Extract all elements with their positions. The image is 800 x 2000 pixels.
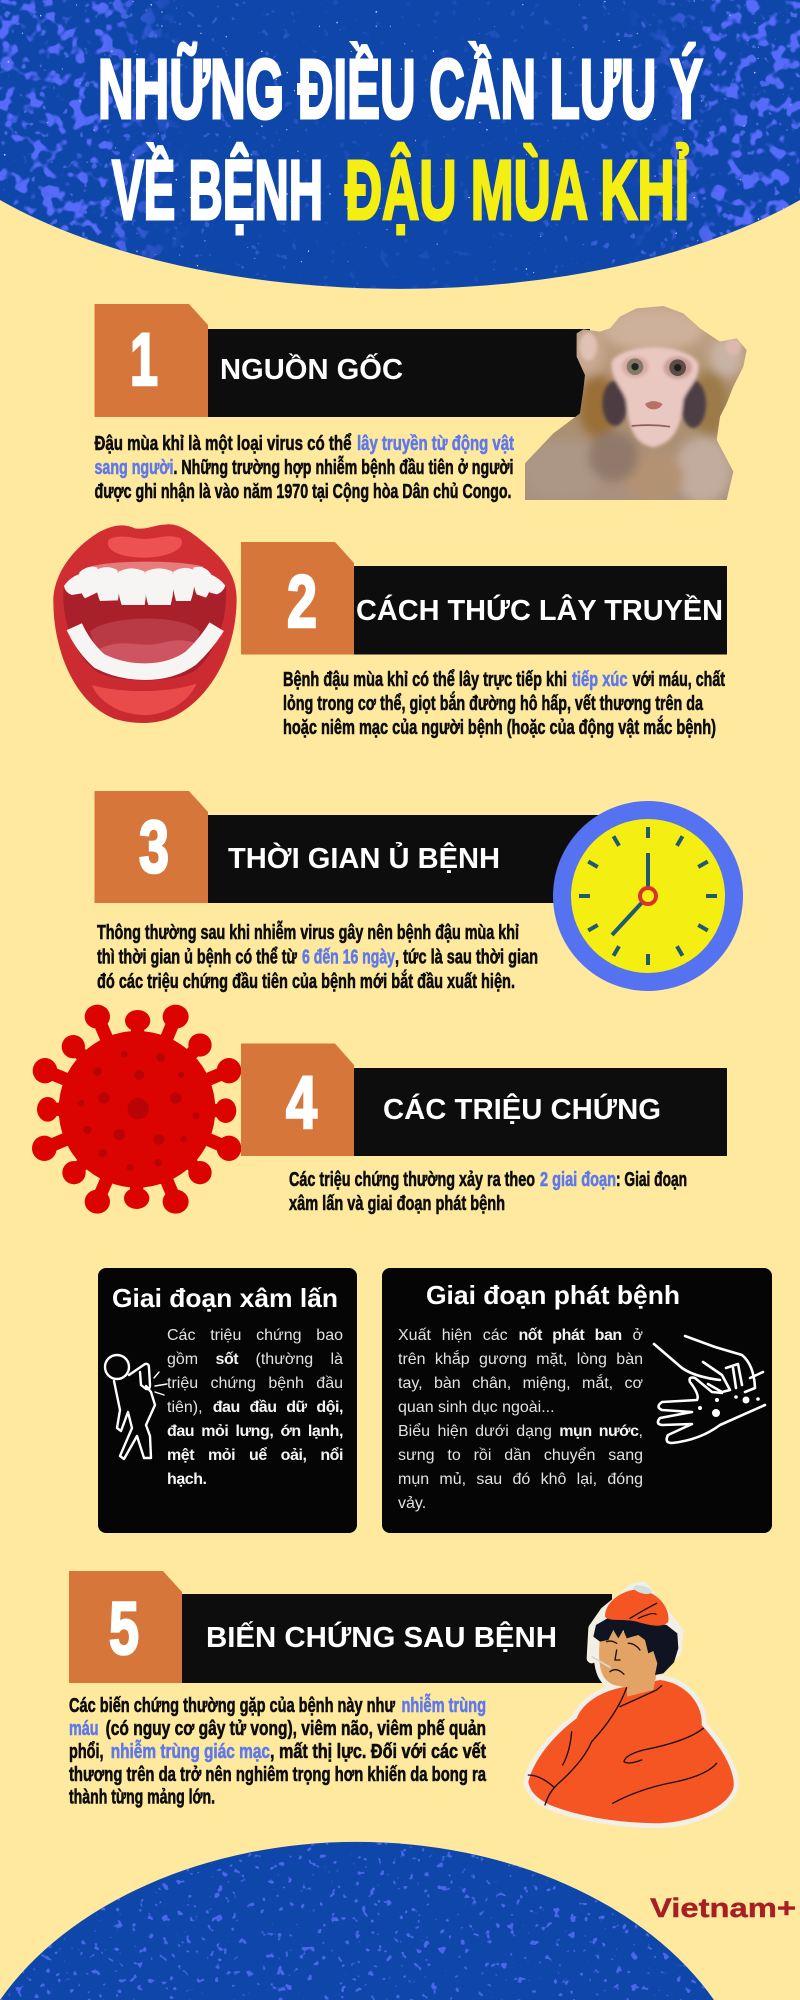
- section 5 orange number badge: [69, 1571, 182, 1683]
- icon: sick man wrapped in blanket: [528, 1584, 734, 1823]
- section 4 body text: : Giai đoạn: [616, 1169, 687, 1191]
- section 5 body text: Các biến chứng thường gặp của bệnh này như: [69, 1695, 395, 1717]
- section 1 body text: Đậu mùa khỉ là một loại virus có thể: [94, 433, 352, 455]
- heading: nguồn gốc: NGUỒN GỐC: [220, 352, 403, 386]
- section 3 body text: Thông thường sau khi nhiễm virus gây nên bệnh đậu mùa khỉ: [97, 920, 519, 944]
- heading: cách thức lây truyền: CÁCH THỨC LÂY TRUYỀN: [356, 593, 723, 627]
- panel text: eruptive phase symptoms: Xuất hiện các nốt phát ban ở: [398, 1327, 643, 1344]
- panel text: eruptive phase symptoms: Biểu hiện dưới dạng mụn nước,: [398, 1423, 643, 1440]
- section 4 body text: 2 giai đoạn: [540, 1169, 616, 1191]
- section 3 body text: đó các triệu chứng đầu tiên của bệnh mới bắt đầu xuất hiện.: [97, 969, 515, 993]
- section 5 body text: nhiễm trùng giác mạc: [111, 1739, 270, 1763]
- section 3 body text: 6 đến 16 ngày: [302, 946, 396, 968]
- logo: Vietnam+: Vietnam+: [650, 1893, 796, 1923]
- section 1 orange number badge: [94, 304, 208, 417]
- section 5 body text: , mất thị lực. Đối với các vết: [270, 1741, 486, 1763]
- panel text: eruptive phase symptoms: tay, bàn chân, miệng, mắt, cơ: [398, 1375, 643, 1392]
- header: blue curved banner: [0, 0, 800, 300]
- section 2: transmission: [241, 542, 727, 739]
- panel heading and person-in-pain icon: Giai đoạn xâm lấn: [112, 1283, 338, 1313]
- panel text: eruptive phase symptoms: trên khắp gương mặt, lòng bàn: [398, 1351, 643, 1368]
- panel text: eruptive phase symptoms: sưng to rồi dần chuyển sang: [398, 1447, 643, 1464]
- number 3: 3: [139, 805, 169, 888]
- lower teeth: [74, 627, 217, 672]
- panel: eruptive phase: [382, 1268, 772, 1533]
- panel text: invasive phase symptoms: đau mỏi lưng, ớn lạnh,: [167, 1423, 343, 1440]
- icon: open mouth: [53, 524, 237, 723]
- number 5: 5: [109, 1587, 139, 1670]
- section 3 orange number badge: [94, 791, 208, 903]
- panel text: invasive phase symptoms: gồm sốt (thường là: [167, 1351, 343, 1368]
- number 4: 4: [286, 1061, 317, 1144]
- icon: clock: [553, 801, 743, 991]
- section 5 body text: máu: [69, 1718, 98, 1740]
- panel text: eruptive phase symptoms: [398, 1327, 643, 1512]
- section 2 body text: tiếp xúc: [572, 669, 628, 691]
- panel text: invasive phase symptoms: tiên), đau đầu dữ dội,: [167, 1399, 343, 1416]
- panel text: invasive phase symptoms: Các triệu chứng bao: [167, 1327, 343, 1344]
- section 1 black title bar: [208, 329, 590, 417]
- section 4 body text: xâm lấn và giai đoạn phát bệnh: [289, 1193, 505, 1215]
- title: [98, 42, 703, 237]
- section 1: origin: [94, 304, 590, 503]
- icon: monkey photo illustration: [523, 306, 747, 503]
- panel text: invasive phase symptoms: triệu chứng bệnh đầu: [167, 1375, 343, 1392]
- heading: biến chứng sau bệnh: BIẾN CHỨNG SAU BỆNH: [206, 1620, 557, 1654]
- section 2 black title bar: [354, 566, 727, 654]
- upper teeth: [64, 567, 225, 605]
- section 3 body text: thì thời gian ủ bệnh có thể từ: [97, 946, 297, 968]
- section 5 body text: phổi,: [69, 1741, 104, 1763]
- section 2 body text: Bệnh đậu mùa khỉ có thể lây trực tiếp khi: [283, 669, 567, 691]
- panel text: invasive phase symptoms: [167, 1327, 344, 1488]
- title: VỀ BỆNH: [112, 143, 323, 237]
- bottom blue dome: [0, 1842, 714, 2000]
- panel text: eruptive phase symptoms: vảy.: [398, 1495, 426, 1512]
- section 3 black title bar: [208, 815, 608, 903]
- section 2 orange number badge: [241, 542, 354, 654]
- section 1 body text: sang người: [94, 457, 174, 479]
- section 1 body text: được ghi nhận là vào năm 1970 tại Cộng hòa Dân chủ Congo.: [94, 481, 512, 503]
- number 2: 2: [287, 560, 317, 643]
- section 4 orange number badge: [241, 1044, 354, 1156]
- section 4 black title bar: [354, 1068, 727, 1156]
- heading: các triệu chứng: CÁC TRIỆU CHỨNG: [383, 1092, 661, 1126]
- section 4 body text: Các triệu chứng thường xảy ra theo: [289, 1169, 535, 1191]
- panel heading and person-in-pain icon: [104, 1283, 338, 1460]
- section 3: incubation: [94, 791, 608, 993]
- panel heading and hands-with-rash icon: Giai đoạn phát bệnh: [426, 1280, 680, 1310]
- icon: red virus: [32, 1005, 241, 1214]
- section 5 body text: thành từng mảng lớn.: [69, 1786, 215, 1808]
- panel text: invasive phase symptoms: mệt mỏi uể oải, nổi: [167, 1447, 343, 1464]
- panel text: eruptive phase symptoms: mụn mủ, sau đó khô lại, đóng: [398, 1471, 643, 1488]
- section 3 body text: , tức là sau thời gian: [395, 946, 538, 968]
- section 2 body text: với máu, chất: [633, 669, 725, 691]
- section 5 body text: nhiễm trùng: [402, 1693, 486, 1717]
- section 5 black title bar: [182, 1594, 612, 1683]
- section 4: symptoms: [241, 1044, 727, 1215]
- number 1: 1: [130, 318, 158, 401]
- panel text: eruptive phase symptoms: quan sinh dục ngoài...: [398, 1399, 555, 1416]
- heading: thời gian ủ bệnh: THỜI GIAN Ủ BỆNH: [228, 841, 500, 875]
- section 5: complications: [69, 1571, 612, 1808]
- section 5 body text: (có nguy cơ gây tử vong), viêm não, viêm phế quản: [106, 1718, 486, 1740]
- section 1 body text: . Những trường hợp nhiễm bệnh đầu tiên ở người: [174, 455, 514, 479]
- panel heading and hands-with-rash icon: [426, 1280, 766, 1444]
- section 1 body text: lây truyền từ động vật: [357, 433, 514, 455]
- section 5 body text: thương trên da trở nên nghiêm trọng hơn khiến da bong ra: [69, 1764, 487, 1786]
- panel text: invasive phase symptoms: hạch.: [167, 1471, 207, 1488]
- panel: invasive phase: [98, 1268, 357, 1533]
